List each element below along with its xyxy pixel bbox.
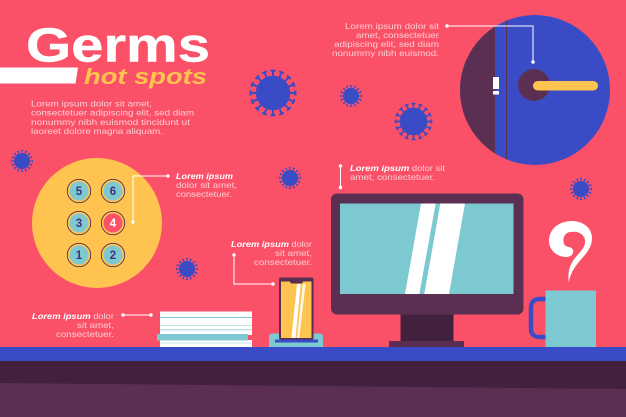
phone callout text: consectetuer. bbox=[254, 258, 312, 267]
books leader line bbox=[121, 313, 153, 317]
germ: centre small bbox=[280, 168, 300, 188]
phone leader line bbox=[232, 253, 275, 286]
buttons callout text: dolor sit amet, bbox=[176, 181, 237, 190]
elevator buttons panel bbox=[32, 158, 162, 288]
stack of books bbox=[157, 312, 252, 347]
button 3: 3 bbox=[76, 218, 82, 230]
button 5: 5 bbox=[76, 186, 83, 198]
door callout text bbox=[332, 22, 440, 58]
intro text block: laoreet dolore magna aliquam. bbox=[31, 127, 163, 136]
germ: left small bbox=[12, 151, 32, 171]
subtitle: hot spots: hot spots bbox=[84, 64, 207, 89]
monitor callout text bbox=[350, 164, 446, 182]
desk underside bbox=[0, 361, 626, 417]
monitor callout text: amet, consectetuer. bbox=[350, 173, 435, 182]
books callout text: sit amet, bbox=[77, 321, 114, 330]
door callout text: amet, consectetuer bbox=[356, 31, 439, 40]
intro text block: Lorem ipsum dolor sit amet, bbox=[31, 100, 152, 108]
intro text block: consectetuer adipiscing elit, sed diam bbox=[31, 109, 194, 118]
germ: top small bbox=[341, 86, 361, 106]
buttons callout text bbox=[176, 172, 237, 199]
books callout text bbox=[32, 312, 114, 339]
intro text block bbox=[31, 100, 194, 136]
buttons leader line bbox=[131, 174, 170, 224]
germ: large centre bbox=[251, 71, 295, 115]
door callout text: Lorem ipsum dolor sit bbox=[345, 22, 440, 31]
germ: medium bbox=[396, 104, 431, 139]
title: Germs: Germs bbox=[26, 20, 210, 72]
books callout text: consectetuer. bbox=[56, 330, 114, 339]
coffee mug bbox=[531, 290, 596, 347]
door leader line bbox=[445, 24, 535, 64]
door handle panel bbox=[455, 10, 610, 170]
button 2: 2 bbox=[110, 250, 116, 262]
germ: lower small bbox=[177, 259, 197, 279]
monitor callout text: Lorem ipsum dolor sit bbox=[350, 164, 446, 173]
button 1: 1 bbox=[76, 250, 83, 262]
buttons callout text: consectetuer. bbox=[176, 190, 232, 199]
phone callout text bbox=[231, 240, 312, 267]
button 6: 6 bbox=[110, 186, 116, 198]
title accent bar bbox=[0, 68, 78, 84]
intro text block: nonummy nibh euismod tincidunt ut bbox=[31, 118, 191, 127]
monitor leader line bbox=[339, 164, 342, 189]
steam bbox=[549, 221, 592, 283]
germ: right small bbox=[571, 179, 591, 199]
door callout text: nonummy nibh euismod. bbox=[332, 49, 439, 58]
phone on stand bbox=[269, 278, 323, 347]
phone callout text: sit amet, bbox=[275, 249, 312, 258]
button 4 highlighted: 4 bbox=[110, 218, 117, 230]
buttons callout text: Lorem ipsum bbox=[176, 172, 233, 181]
floor bbox=[0, 383, 626, 417]
books callout text: Lorem ipsum dolor bbox=[32, 312, 114, 321]
desk top bbox=[0, 347, 626, 361]
monitor bbox=[331, 194, 524, 347]
door callout text: adipiscing elit, sed diam bbox=[334, 40, 439, 49]
phone callout text: Lorem ipsum dolor bbox=[231, 240, 312, 249]
